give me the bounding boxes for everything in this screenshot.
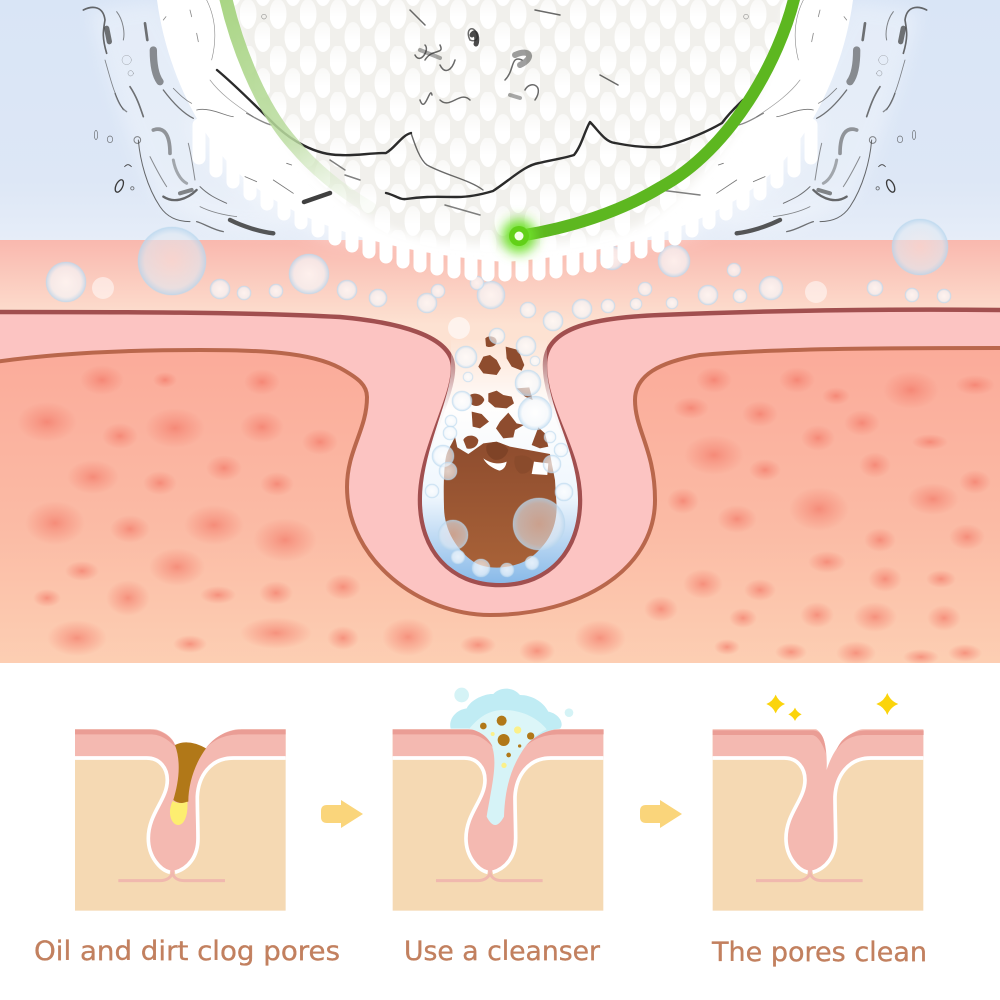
epidermis layer xyxy=(0,310,1000,670)
skin surface layer xyxy=(0,240,1000,440)
caption 3: The pores clean xyxy=(711,937,927,968)
soft white haze around head xyxy=(190,120,820,240)
open pore top xyxy=(150,729,242,748)
head body xyxy=(157,0,853,262)
right splash xyxy=(717,0,927,233)
sky background xyxy=(0,0,1000,241)
base skin xyxy=(393,729,603,911)
arrow 1 xyxy=(321,800,363,828)
left splash xyxy=(83,0,293,233)
bristle dots xyxy=(228,0,790,252)
surface strip xyxy=(713,730,924,753)
water splash xyxy=(83,0,927,233)
surface strip xyxy=(75,729,286,748)
panel: oil and dirt clog pores xyxy=(75,729,286,911)
open pore top xyxy=(468,729,560,825)
brush head with bristles xyxy=(157,0,853,275)
bristle fringe xyxy=(199,125,811,275)
oil plug xyxy=(170,801,187,825)
base skin xyxy=(75,729,286,911)
bright right arc xyxy=(519,0,795,236)
green light arcs xyxy=(225,0,795,253)
bubbles rising xyxy=(46,219,951,577)
panel: use a cleanser xyxy=(393,688,604,911)
pore cavity xyxy=(422,340,578,583)
dirt particles xyxy=(480,716,534,757)
dirt plug and fragments xyxy=(444,336,557,568)
foam bubbles xyxy=(454,688,469,702)
head inner bristle field xyxy=(232,0,790,245)
surface strip xyxy=(393,729,604,748)
foam cloud xyxy=(450,689,562,748)
open pore xyxy=(815,729,866,770)
caption 1: Oil and dirt clog pores xyxy=(34,936,340,967)
glow at arc tip xyxy=(502,219,536,253)
dirt plug xyxy=(173,742,206,803)
arrow 2 xyxy=(640,800,682,828)
sparkle icons xyxy=(766,693,898,721)
oil particles xyxy=(491,726,521,768)
lower white page area xyxy=(0,663,1000,1000)
dermis layer with blotches xyxy=(0,348,1000,675)
water crest lines xyxy=(217,10,743,215)
base skin xyxy=(713,729,923,911)
faint left arc xyxy=(225,0,370,208)
panel: the pores clean xyxy=(713,693,924,911)
caption 2: Use a cleanser xyxy=(404,936,601,967)
foam centre xyxy=(469,710,547,750)
